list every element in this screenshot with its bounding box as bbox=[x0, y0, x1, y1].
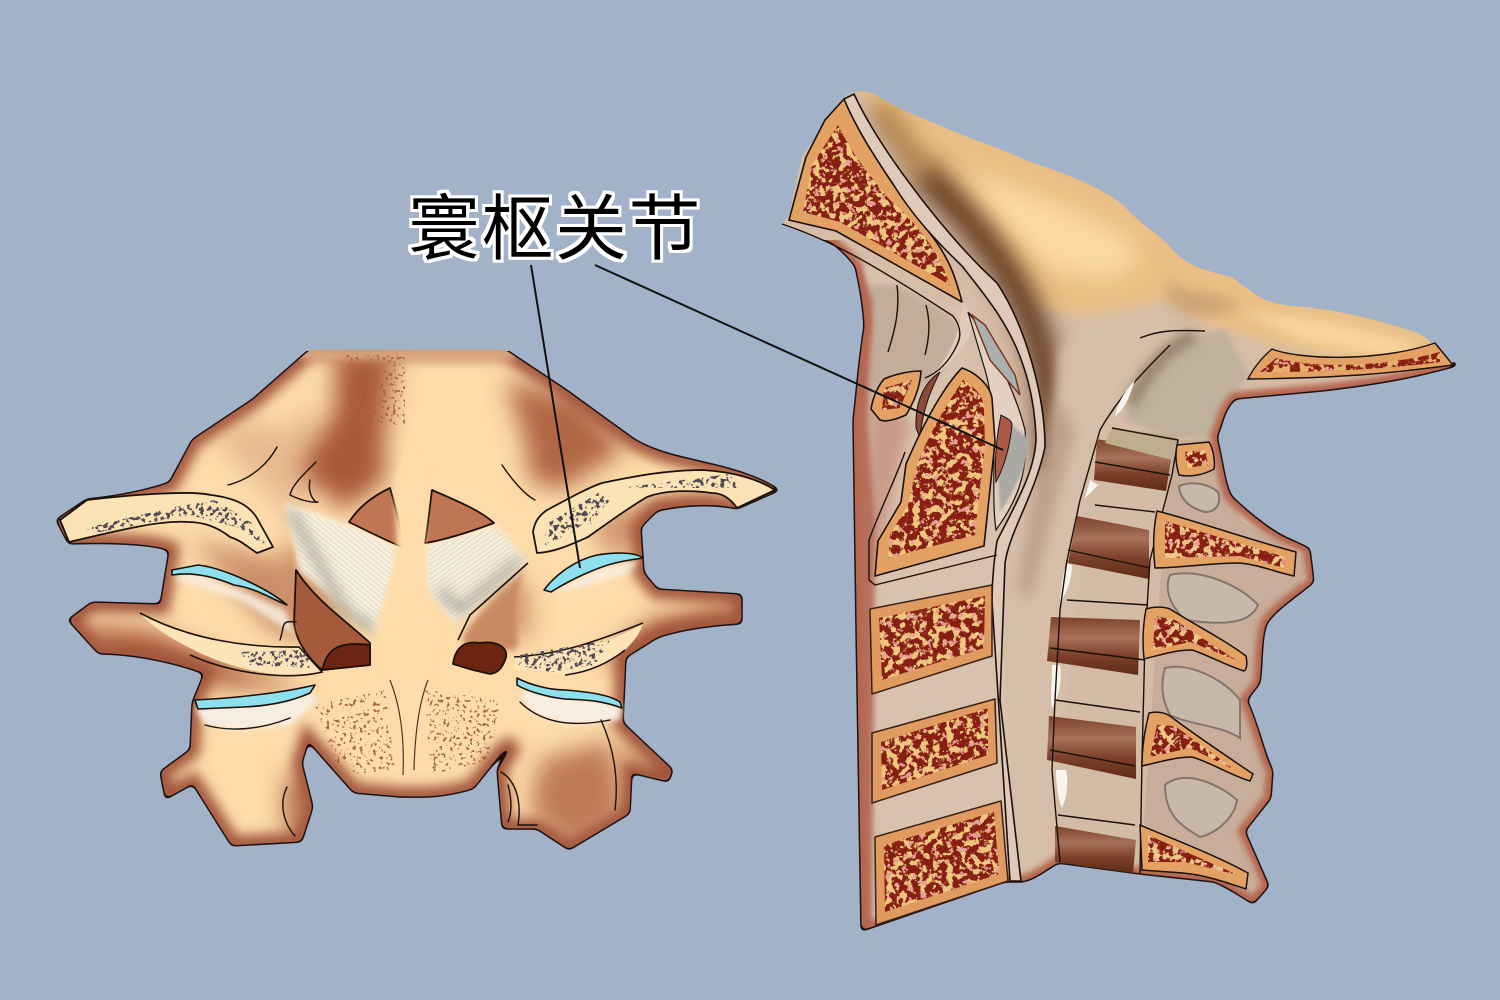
foramina bbox=[294, 563, 528, 674]
title label: 寰枢关节 bbox=[408, 190, 702, 270]
ligament and contour lines bbox=[782, 224, 1205, 585]
speckled areas bbox=[345, 355, 405, 425]
contour lines left bbox=[205, 447, 616, 836]
dural canal band bbox=[844, 94, 1045, 881]
transverse ligament and grey tissue bbox=[968, 312, 1030, 530]
ligaments bbox=[285, 503, 528, 633]
shading beside canal bbox=[920, 170, 1052, 470]
interspinous pads bbox=[1162, 483, 1258, 837]
soft tissue: front neck bbox=[854, 262, 1015, 935]
central spinous crest bbox=[377, 430, 441, 775]
occipital bone bbox=[1248, 343, 1453, 379]
ligamentum flavum segments (brown) bbox=[1047, 428, 1178, 873]
cervical vertebral bodies bbox=[870, 585, 1008, 925]
articular discs (blue) bbox=[172, 553, 643, 709]
right figure: sagittal section of neck bbox=[775, 70, 1470, 935]
spinous processes bbox=[1140, 442, 1296, 889]
bone speckles bbox=[85, 474, 738, 672]
bone cross-sections bbox=[60, 470, 775, 553]
spinal canal lines bbox=[1050, 428, 1178, 873]
skull bone bbox=[789, 99, 962, 302]
spinal cord bbox=[1041, 344, 1086, 486]
lower bone wedges bbox=[140, 613, 643, 676]
white cartilage bbox=[172, 560, 640, 730]
label lines bbox=[531, 265, 1003, 568]
head tan mass bbox=[857, 92, 1452, 362]
left figure: posterior view of atlantoaxial joint bbox=[50, 340, 790, 861]
anterior arch of atlas bbox=[871, 371, 940, 438]
posterior muscle bbox=[1125, 330, 1250, 440]
axis body and dens bbox=[875, 368, 995, 576]
triangular membranes bbox=[349, 488, 494, 547]
white slivers bbox=[1051, 380, 1135, 808]
